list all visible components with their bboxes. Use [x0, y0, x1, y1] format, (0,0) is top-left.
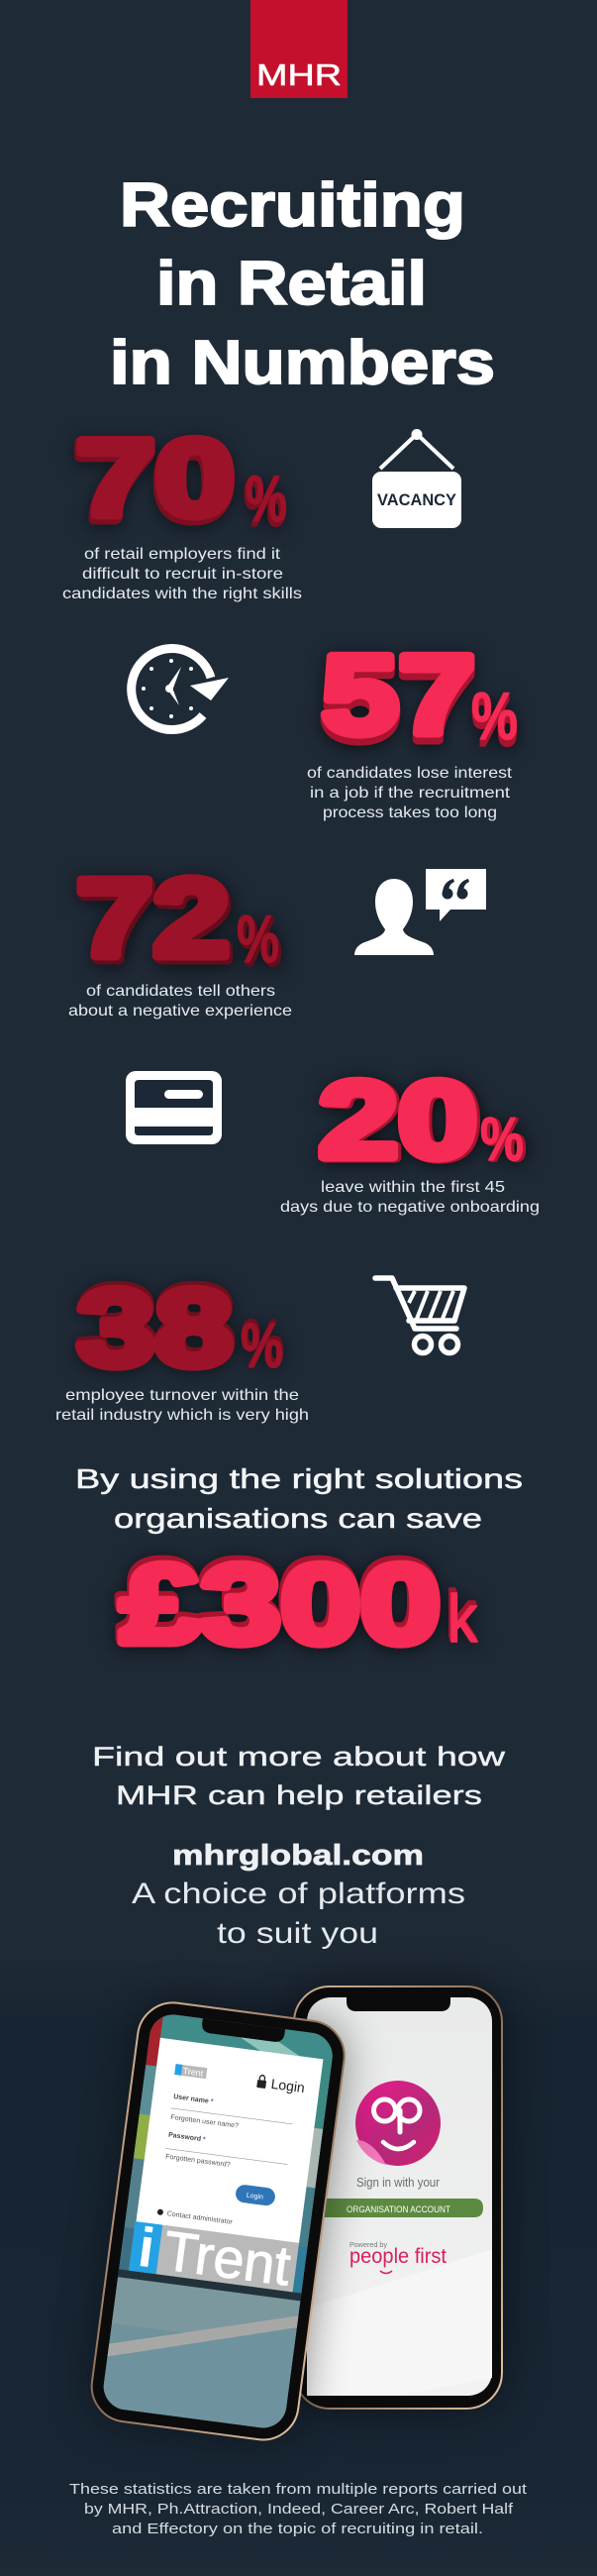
- panel: stat 70 percent: [62, 417, 302, 602]
- phone: iTrent: [87, 1998, 348, 2444]
- number: 57%: 57: [322, 632, 475, 757]
- logo: people first: Powered by: [349, 2242, 388, 2249]
- login form: Forgotten user name?: [170, 2114, 239, 2130]
- caption: 20%: days due to negative onboarding: [280, 1199, 540, 1216]
- button: organisation account: [307, 2199, 483, 2217]
- footer: sources: and Effectory on the topic of recruiting in retail.: [112, 2521, 483, 2537]
- number: 57%: [322, 632, 518, 757]
- caption: 20%: leave within the first 45: [321, 1179, 505, 1196]
- logo: MHR: MHR: [256, 57, 342, 92]
- number: 38%: %: [241, 1310, 283, 1381]
- platforms subheading: A choice of platforms: [132, 1878, 465, 1910]
- heading: savings: organisations can save: [114, 1503, 482, 1534]
- number: 20%: [319, 1059, 524, 1181]
- large iTrent logo: Trent: [160, 2218, 294, 2298]
- login form: User name *: [173, 2093, 214, 2105]
- icon: vacancy sign: [372, 429, 461, 528]
- phone: People First: [294, 1986, 502, 2409]
- number: 70%: %: [246, 462, 287, 535]
- caption: 38%: [55, 1387, 309, 1424]
- number: 72%: [76, 856, 279, 980]
- number: 72%: 72: [76, 856, 230, 980]
- login form: Forgotten password?: [165, 2154, 231, 2169]
- background: phone area glow: [0, 1957, 597, 2576]
- title: in Numbers: [110, 329, 495, 397]
- button: organisation account: ORGANISATION ACCOUNT: [347, 2204, 450, 2215]
- login heading: Login: [270, 2076, 306, 2095]
- login card: [136, 2038, 323, 2244]
- icon: clock with arrow: [132, 649, 229, 730]
- login form: Password *: [168, 2132, 206, 2144]
- number: 57%: %: [471, 679, 518, 754]
- caption: 70%: difficult to recruit in-store: [82, 566, 283, 583]
- login heading: [256, 2075, 304, 2094]
- caption: 72%: about a negative experience: [68, 1003, 292, 1020]
- login form: Contact administrator: [166, 2210, 234, 2226]
- title: in Retail: [156, 250, 427, 318]
- number: 20%: 20: [319, 1059, 477, 1181]
- panel: stat 38 percent: [55, 1267, 309, 1424]
- website link: mhrglobal.com: [172, 1840, 424, 1872]
- caption: 20%: [280, 1179, 540, 1216]
- panel: stat 72 percent: [68, 856, 292, 1020]
- caption: 70%: [62, 546, 302, 602]
- number: 38%: [77, 1267, 283, 1389]
- large iTrent logo: i: [135, 2215, 158, 2279]
- heading: savings: [75, 1463, 523, 1534]
- caption: 72%: of candidates tell others: [86, 983, 275, 1000]
- number: 20%: %: [480, 1106, 524, 1174]
- platforms subheading: to suit you: [217, 1917, 378, 1950]
- logo: op smiley: [355, 2081, 441, 2166]
- number: 38%: 38: [77, 1267, 233, 1389]
- footer: sources: [69, 2481, 528, 2537]
- mini iTrent logo: [174, 2064, 207, 2079]
- caption: 70%: candidates with the right skills: [62, 586, 302, 602]
- mini iTrent logo: Trent: [182, 2066, 204, 2079]
- sign in text: Sign in with your: [356, 2175, 441, 2190]
- number: 70%: [76, 417, 287, 539]
- login form: [156, 2093, 295, 2232]
- logo: people first: people first: [349, 2245, 447, 2268]
- caption: 38%: employee turnover within the: [65, 1387, 299, 1404]
- platforms subheading: [132, 1878, 465, 1950]
- panel: stat 20 percent: [280, 1059, 540, 1216]
- caption: 57%: [307, 765, 513, 821]
- call to action text: MHR can help retailers: [116, 1780, 482, 1810]
- icon: credit card: [126, 1071, 222, 1144]
- footer: sources: by MHR, Ph.Attraction, Indeed, Career Arc, Robert Half: [84, 2501, 514, 2518]
- number: £300k: £300: [121, 1542, 441, 1666]
- icon: shopping cart: [375, 1278, 464, 1353]
- number: 70%: 70: [76, 417, 235, 539]
- number: 72%: %: [237, 902, 279, 977]
- login form: Login: [246, 2192, 263, 2201]
- panel: stat 57 percent: [307, 632, 518, 821]
- caption: 57%: of candidates lose interest: [307, 765, 513, 782]
- number: £300k: [121, 1542, 478, 1666]
- logo: MHR: [250, 0, 348, 98]
- caption: 57%: in a job if the recruitment: [310, 785, 511, 802]
- caption: 70%: of retail employers find it: [84, 546, 281, 563]
- panel: phones: [87, 1986, 502, 2444]
- heading: savings: By using the right solutions: [75, 1463, 523, 1494]
- call to action text: Find out more about how: [92, 1742, 506, 1771]
- call to action text: [92, 1742, 506, 1950]
- caption: 72%: [68, 983, 292, 1020]
- caption: 38%: retail industry which is very high: [55, 1407, 309, 1424]
- title: [110, 171, 495, 397]
- number: £300k: k: [448, 1581, 478, 1657]
- caption: 57%: process takes too long: [323, 805, 497, 821]
- icon: person with speech bubble: [354, 869, 486, 955]
- title: Recruiting: [120, 171, 465, 240]
- icon: vacancy sign: VACANCY: [377, 491, 456, 509]
- footer: sources: These statistics are taken from multiple reports carried out: [69, 2481, 528, 2498]
